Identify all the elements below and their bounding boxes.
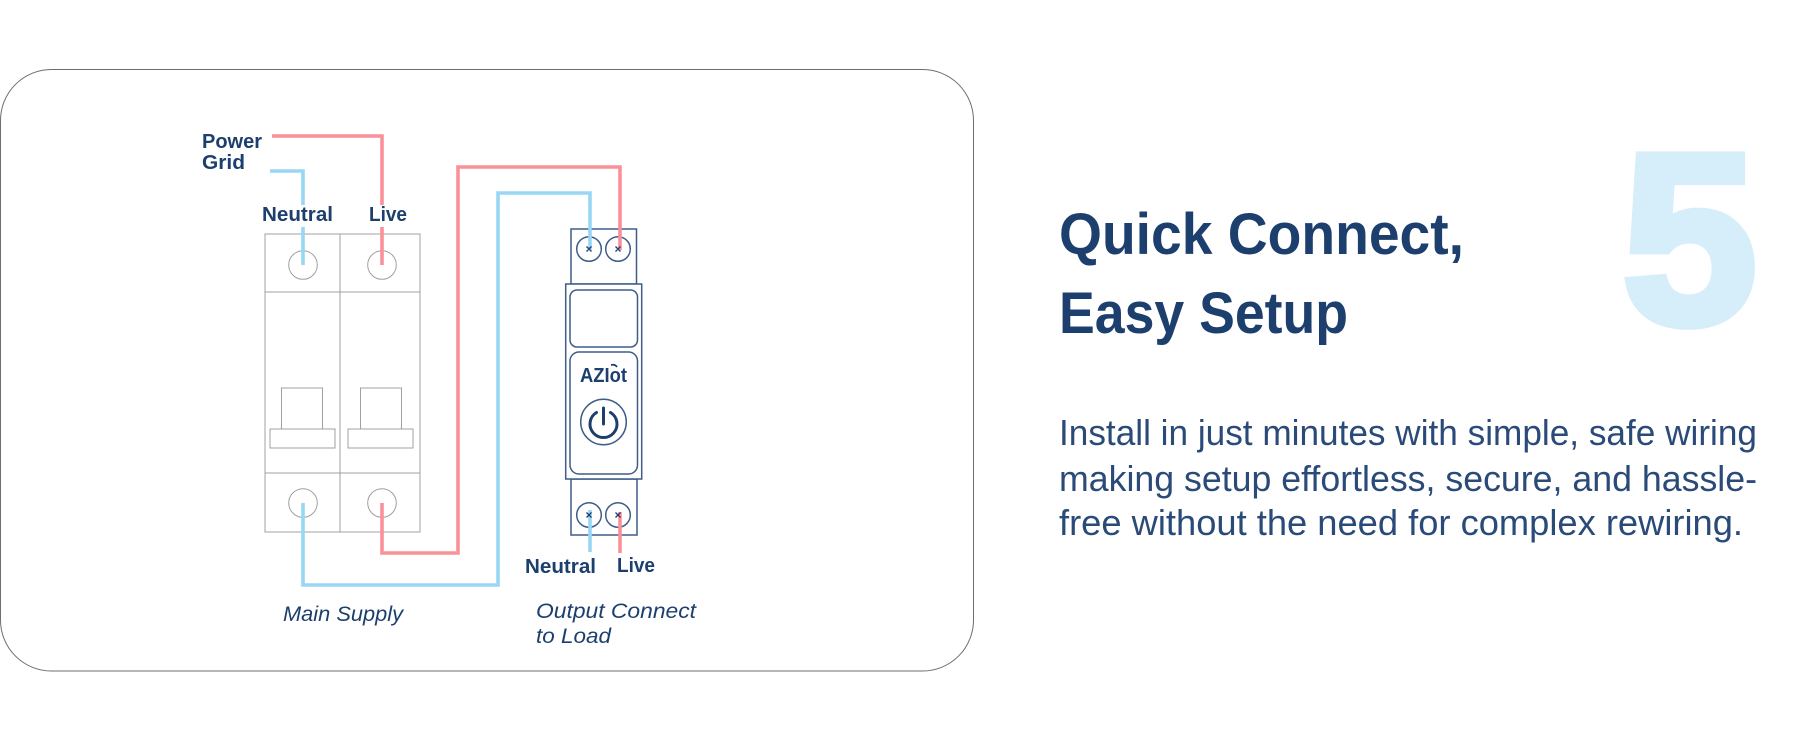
wire: live from power grid [272,136,382,265]
icon: power button [590,408,617,438]
caption: output connect to load [536,600,697,648]
caption: output connect to load: to Load [536,625,612,648]
body text: making setup effortless, secure, and hassle- [1059,458,1757,499]
wire: neutral output [588,510,592,552]
label: neutral output: Neutral [525,556,596,578]
caption: output connect to load: Output Connect [536,600,697,623]
heading [1059,202,1464,346]
label: power grid [202,131,262,174]
device: Aziot relay [566,229,642,535]
circuit breaker [265,234,420,532]
wire: neutral from power grid [270,171,303,265]
caption: main supply: Main Supply [283,603,405,626]
step number: 5 [1622,104,1757,375]
label: neutral input: Neutral [262,204,333,226]
label: live output: Live [617,555,655,577]
body text: Install in just minutes with simple, safe wiring [1059,412,1757,453]
body text [1059,412,1757,543]
heading: Quick Connect, [1059,202,1464,267]
label: power grid: Power [202,131,262,153]
terminal screws [586,246,620,518]
wire: live main supply to relay [382,167,620,553]
logo: Aziot: AZIot [580,365,627,387]
label: live input: Live [369,204,407,226]
panel: wiring diagram [0,70,974,671]
wire: neutral main supply to relay [303,193,590,585]
body text: free without the need for complex rewiring. [1059,502,1743,543]
label: power grid: Grid [202,152,245,174]
heading: Easy Setup [1059,281,1348,346]
wire: live output [618,512,622,553]
